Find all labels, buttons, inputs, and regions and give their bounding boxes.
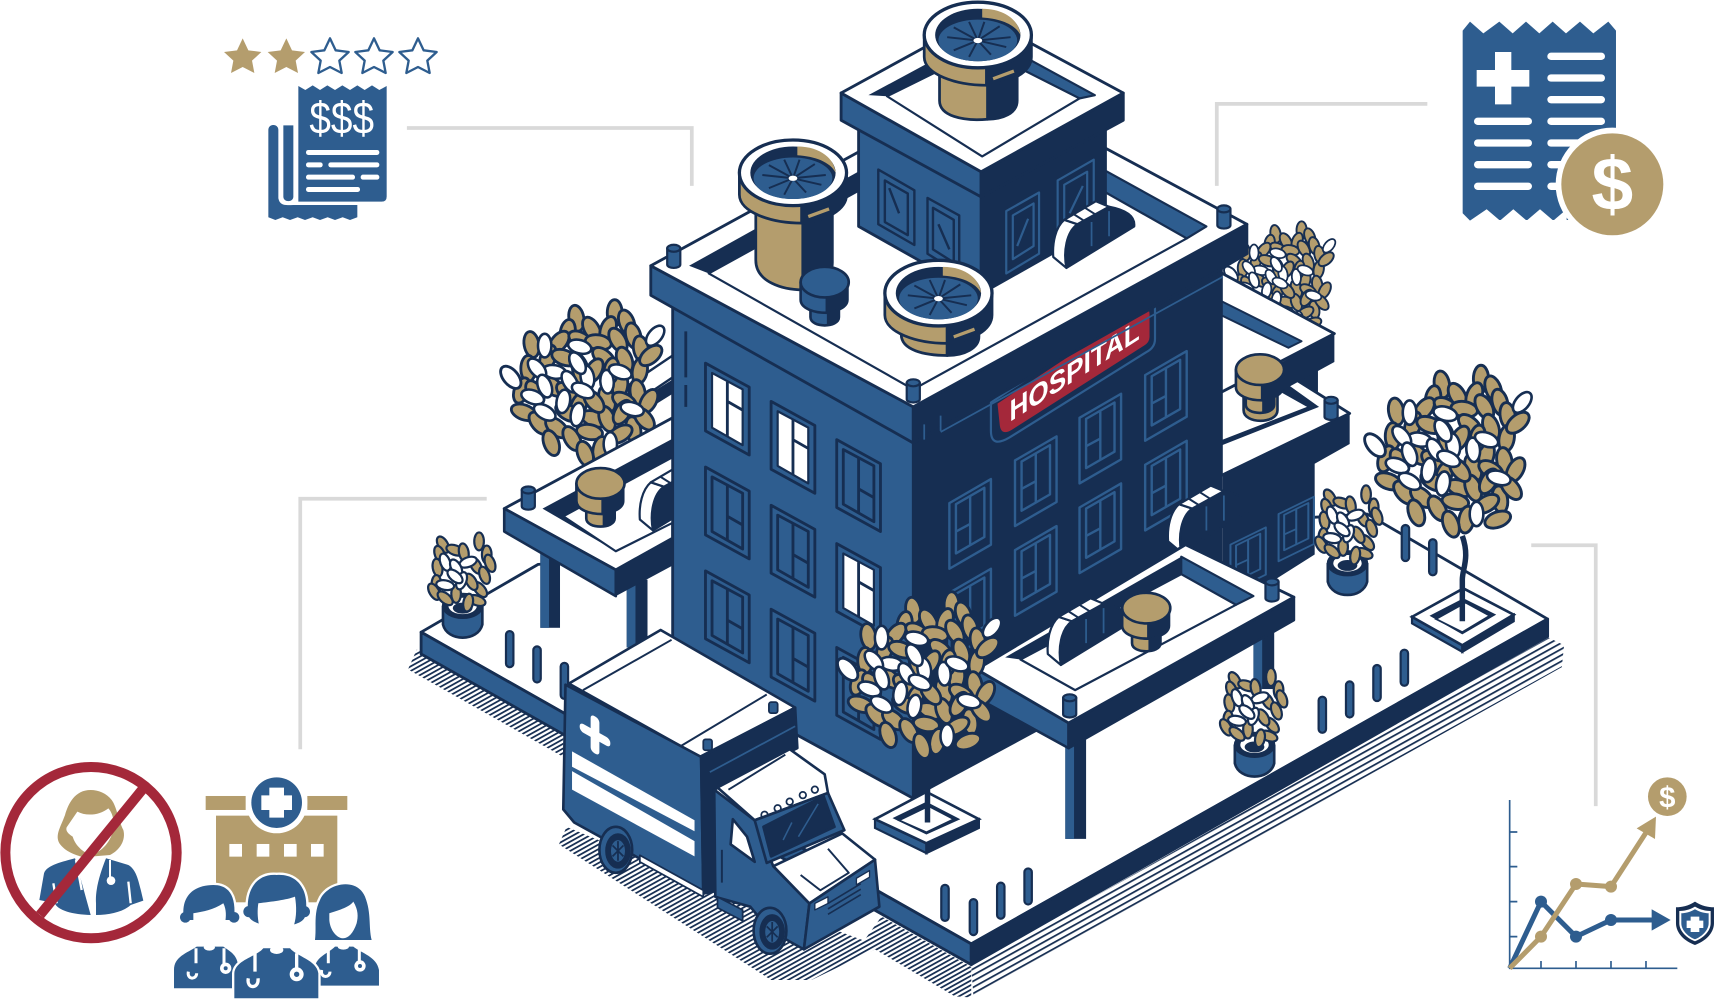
vent: roof centre [885,260,992,355]
right doctor [315,884,379,986]
shield [1676,902,1714,945]
vent: annex [924,2,1031,120]
centre doctor [234,875,318,998]
leader line: right [1531,545,1596,806]
upper terrace columns [1299,366,1318,410]
annex block [841,16,1123,295]
rear skylight [1168,486,1249,552]
coin [1648,777,1687,816]
blue line [1510,896,1671,968]
right tree and planter [1361,365,1535,652]
potted plant: left [426,532,498,638]
cab roof [718,749,828,820]
hood [773,833,875,903]
stars [224,38,437,73]
roof posts [667,205,1230,402]
right wall [913,268,1223,798]
left wall windows [705,363,880,739]
left tree [497,300,668,469]
icon: hospital and medical team [174,772,379,998]
coin: $ [1659,781,1675,814]
skirt [640,855,703,897]
main building [651,2,1247,798]
canopy columns [540,547,648,647]
leader line: top left [407,128,692,186]
side window [731,819,755,862]
prohibition ring [5,767,177,938]
left canopy [504,418,721,647]
potted plant: right rear [1313,485,1385,595]
grille front [804,860,879,949]
receipt lines [306,150,379,192]
upper terrace [1214,269,1334,396]
icon: cost and outcome line chart [1510,777,1714,968]
front receipt [298,85,387,202]
potted plant: front right [1217,668,1289,777]
gold line [1510,817,1656,968]
ground shadow hatching [408,638,1564,997]
front tree and planter [834,592,1005,853]
back-left terrace strips [629,355,673,421]
rear wheel [599,827,632,873]
body stripes [572,751,695,856]
body cross [580,708,610,762]
back tree [1221,221,1338,336]
icon: rating stars and cost receipt [224,38,437,220]
cab step [718,897,743,921]
icon: medical bill with dollar coin [1463,22,1669,241]
canopy columns [1065,607,1274,839]
wall dash marks [684,331,687,407]
bollards [506,525,1437,935]
icon: medical bill with dollar coin: $ [1591,142,1633,226]
roof slab [651,83,1247,443]
axes [1510,800,1677,968]
post [1325,397,1338,420]
cab side [714,790,809,949]
right rear wing [1214,269,1350,612]
hospital sign: HOSPITAL [1010,312,1140,429]
lower terrace [1214,328,1350,612]
box body [563,630,797,894]
roof skylight [1053,201,1134,268]
leader line: top right [1217,104,1427,186]
roof lights [761,786,818,818]
small blue cap [801,267,849,326]
front wheel [754,908,786,954]
front canopy [977,545,1294,839]
left doctor [174,885,239,988]
hospital [206,772,347,902]
windshield [755,793,844,863]
right wall windows [949,351,1187,658]
ambulance [563,630,879,954]
leader line: left [300,499,487,749]
female doctor [39,790,143,915]
vent: roof left [739,140,847,290]
ground platform [421,514,1548,965]
back paper [268,125,357,220]
dollar signs: $$$ [309,92,374,143]
icon: no doctor [5,767,177,938]
rear vent [1236,354,1284,421]
left wall [673,306,913,798]
